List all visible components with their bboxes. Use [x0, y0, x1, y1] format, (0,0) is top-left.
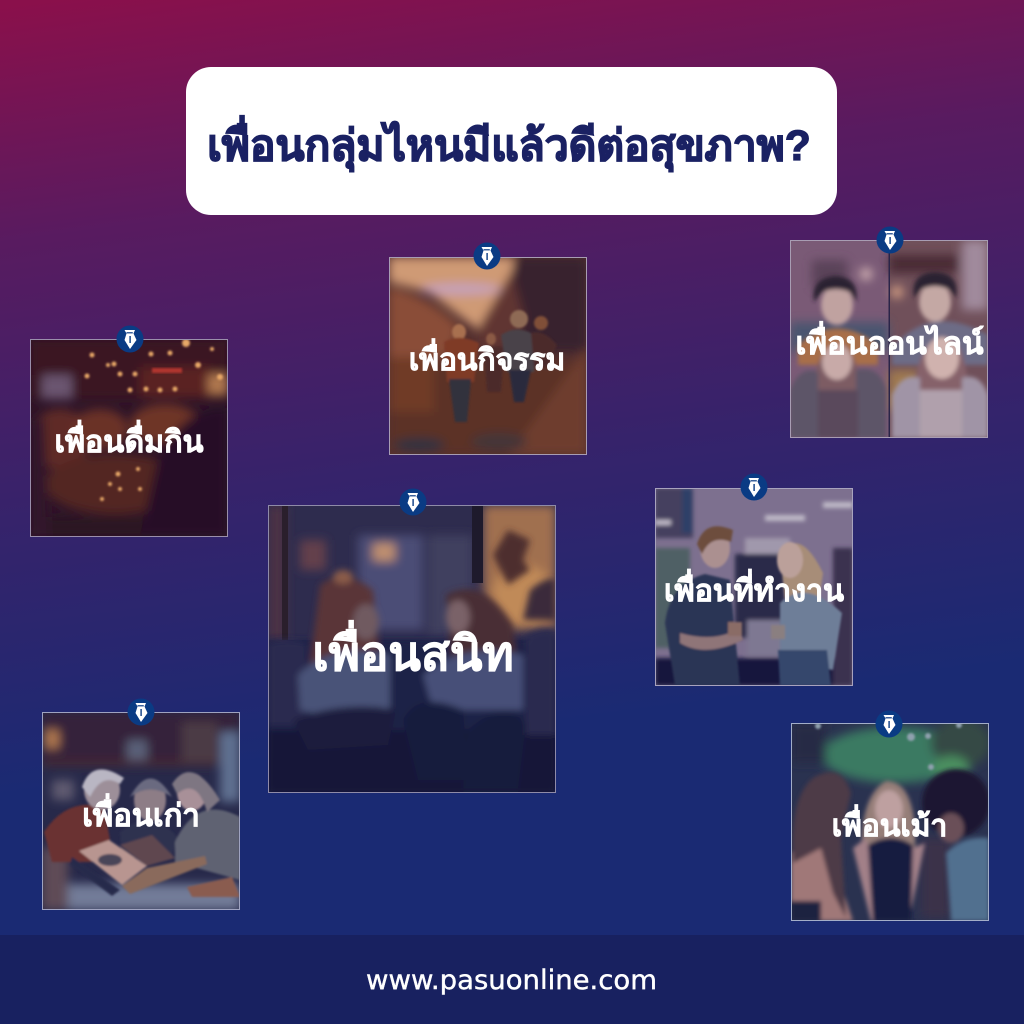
panel: old friends	[42, 698, 240, 910]
label: close friends: เพื่อนสนิท	[312, 620, 514, 681]
footer bar: www.pasuonline.com	[366, 965, 657, 996]
title banner: เพื่อนกลุ่มไหนมีแล้วดีต่อสุขภาพ?	[207, 115, 811, 172]
panel: close friends	[268, 488, 556, 793]
label: old friends: เพื่อนเก่า	[82, 793, 200, 833]
label: online friends: เพื่อนออนไลน์	[795, 321, 984, 361]
icon: pen nib	[128, 698, 154, 726]
icon: pen nib	[400, 488, 426, 516]
panel: acquaintance friends	[791, 710, 991, 921]
panel: online friends	[790, 226, 988, 438]
icon: pen nib	[116, 326, 144, 352]
icon: pen nib	[876, 710, 902, 738]
label: work friends: เพื่อนที่ทำงาน	[664, 569, 844, 608]
title banner	[186, 67, 837, 215]
panel: drinking friends	[30, 326, 228, 537]
panel: activity friends	[389, 242, 587, 455]
footer bar	[0, 935, 1024, 1024]
label: drinking friends: เพื่อนดื่มกิน	[55, 420, 204, 459]
icon: pen nib	[876, 226, 904, 254]
label: acquaintance friends: เพื่อนเม้า	[832, 804, 947, 843]
icon: pen nib	[740, 474, 768, 500]
panel: work friends	[655, 474, 853, 686]
label: activity friends: เพื่อนกิจรรม	[409, 338, 565, 377]
icon: pen nib	[474, 242, 500, 270]
